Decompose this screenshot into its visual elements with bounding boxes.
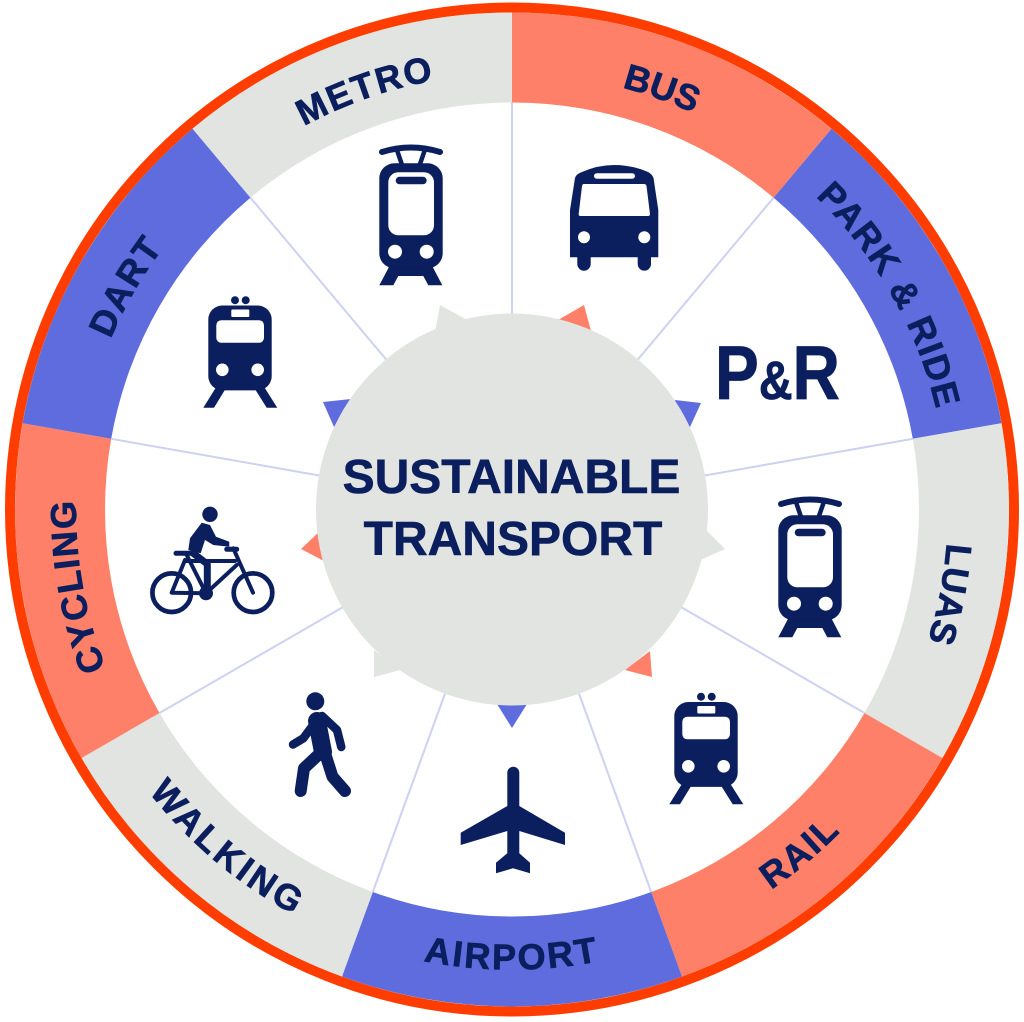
icon: walking person bbox=[293, 692, 345, 791]
band segment: airport bbox=[342, 892, 682, 1006]
label: airport: AIRPORT bbox=[424, 936, 595, 970]
icon: airplane bbox=[461, 767, 565, 873]
label: cycling: CYCLING bbox=[50, 502, 103, 672]
icon: rail train bbox=[669, 693, 743, 804]
band segment: park and ride bbox=[774, 129, 1001, 439]
label: metro: METRO bbox=[294, 58, 430, 126]
band segment: bus bbox=[512, 12, 832, 198]
label: luas: LUAS bbox=[930, 545, 972, 644]
arrowheads around central circle bbox=[301, 305, 725, 728]
label: rail: RAIL bbox=[758, 824, 840, 889]
icon: cyclist bbox=[152, 507, 272, 612]
label: walking: WALKING bbox=[152, 776, 302, 911]
band segment: walking bbox=[82, 713, 373, 976]
icon: dart train bbox=[203, 296, 277, 408]
label: bus: BUS bbox=[624, 64, 700, 110]
title bbox=[343, 451, 680, 566]
icon: bus bbox=[570, 165, 658, 271]
label: park and ride: PARK & RIDE bbox=[817, 180, 960, 408]
band segment: metro bbox=[192, 12, 512, 198]
central circle bbox=[316, 314, 708, 706]
title: SUSTAINABLE bbox=[343, 451, 680, 504]
band segment: cycling bbox=[15, 423, 160, 758]
icon: park and ride: P&R bbox=[715, 331, 840, 416]
title: TRANSPORT bbox=[364, 513, 662, 566]
icon: luas tram bbox=[778, 500, 842, 637]
band segment: luas bbox=[864, 423, 1009, 758]
band segment: dart bbox=[23, 129, 250, 439]
icon: metro tram bbox=[379, 148, 443, 285]
label: dart: DART bbox=[88, 234, 158, 338]
band segment: rail bbox=[651, 713, 942, 976]
